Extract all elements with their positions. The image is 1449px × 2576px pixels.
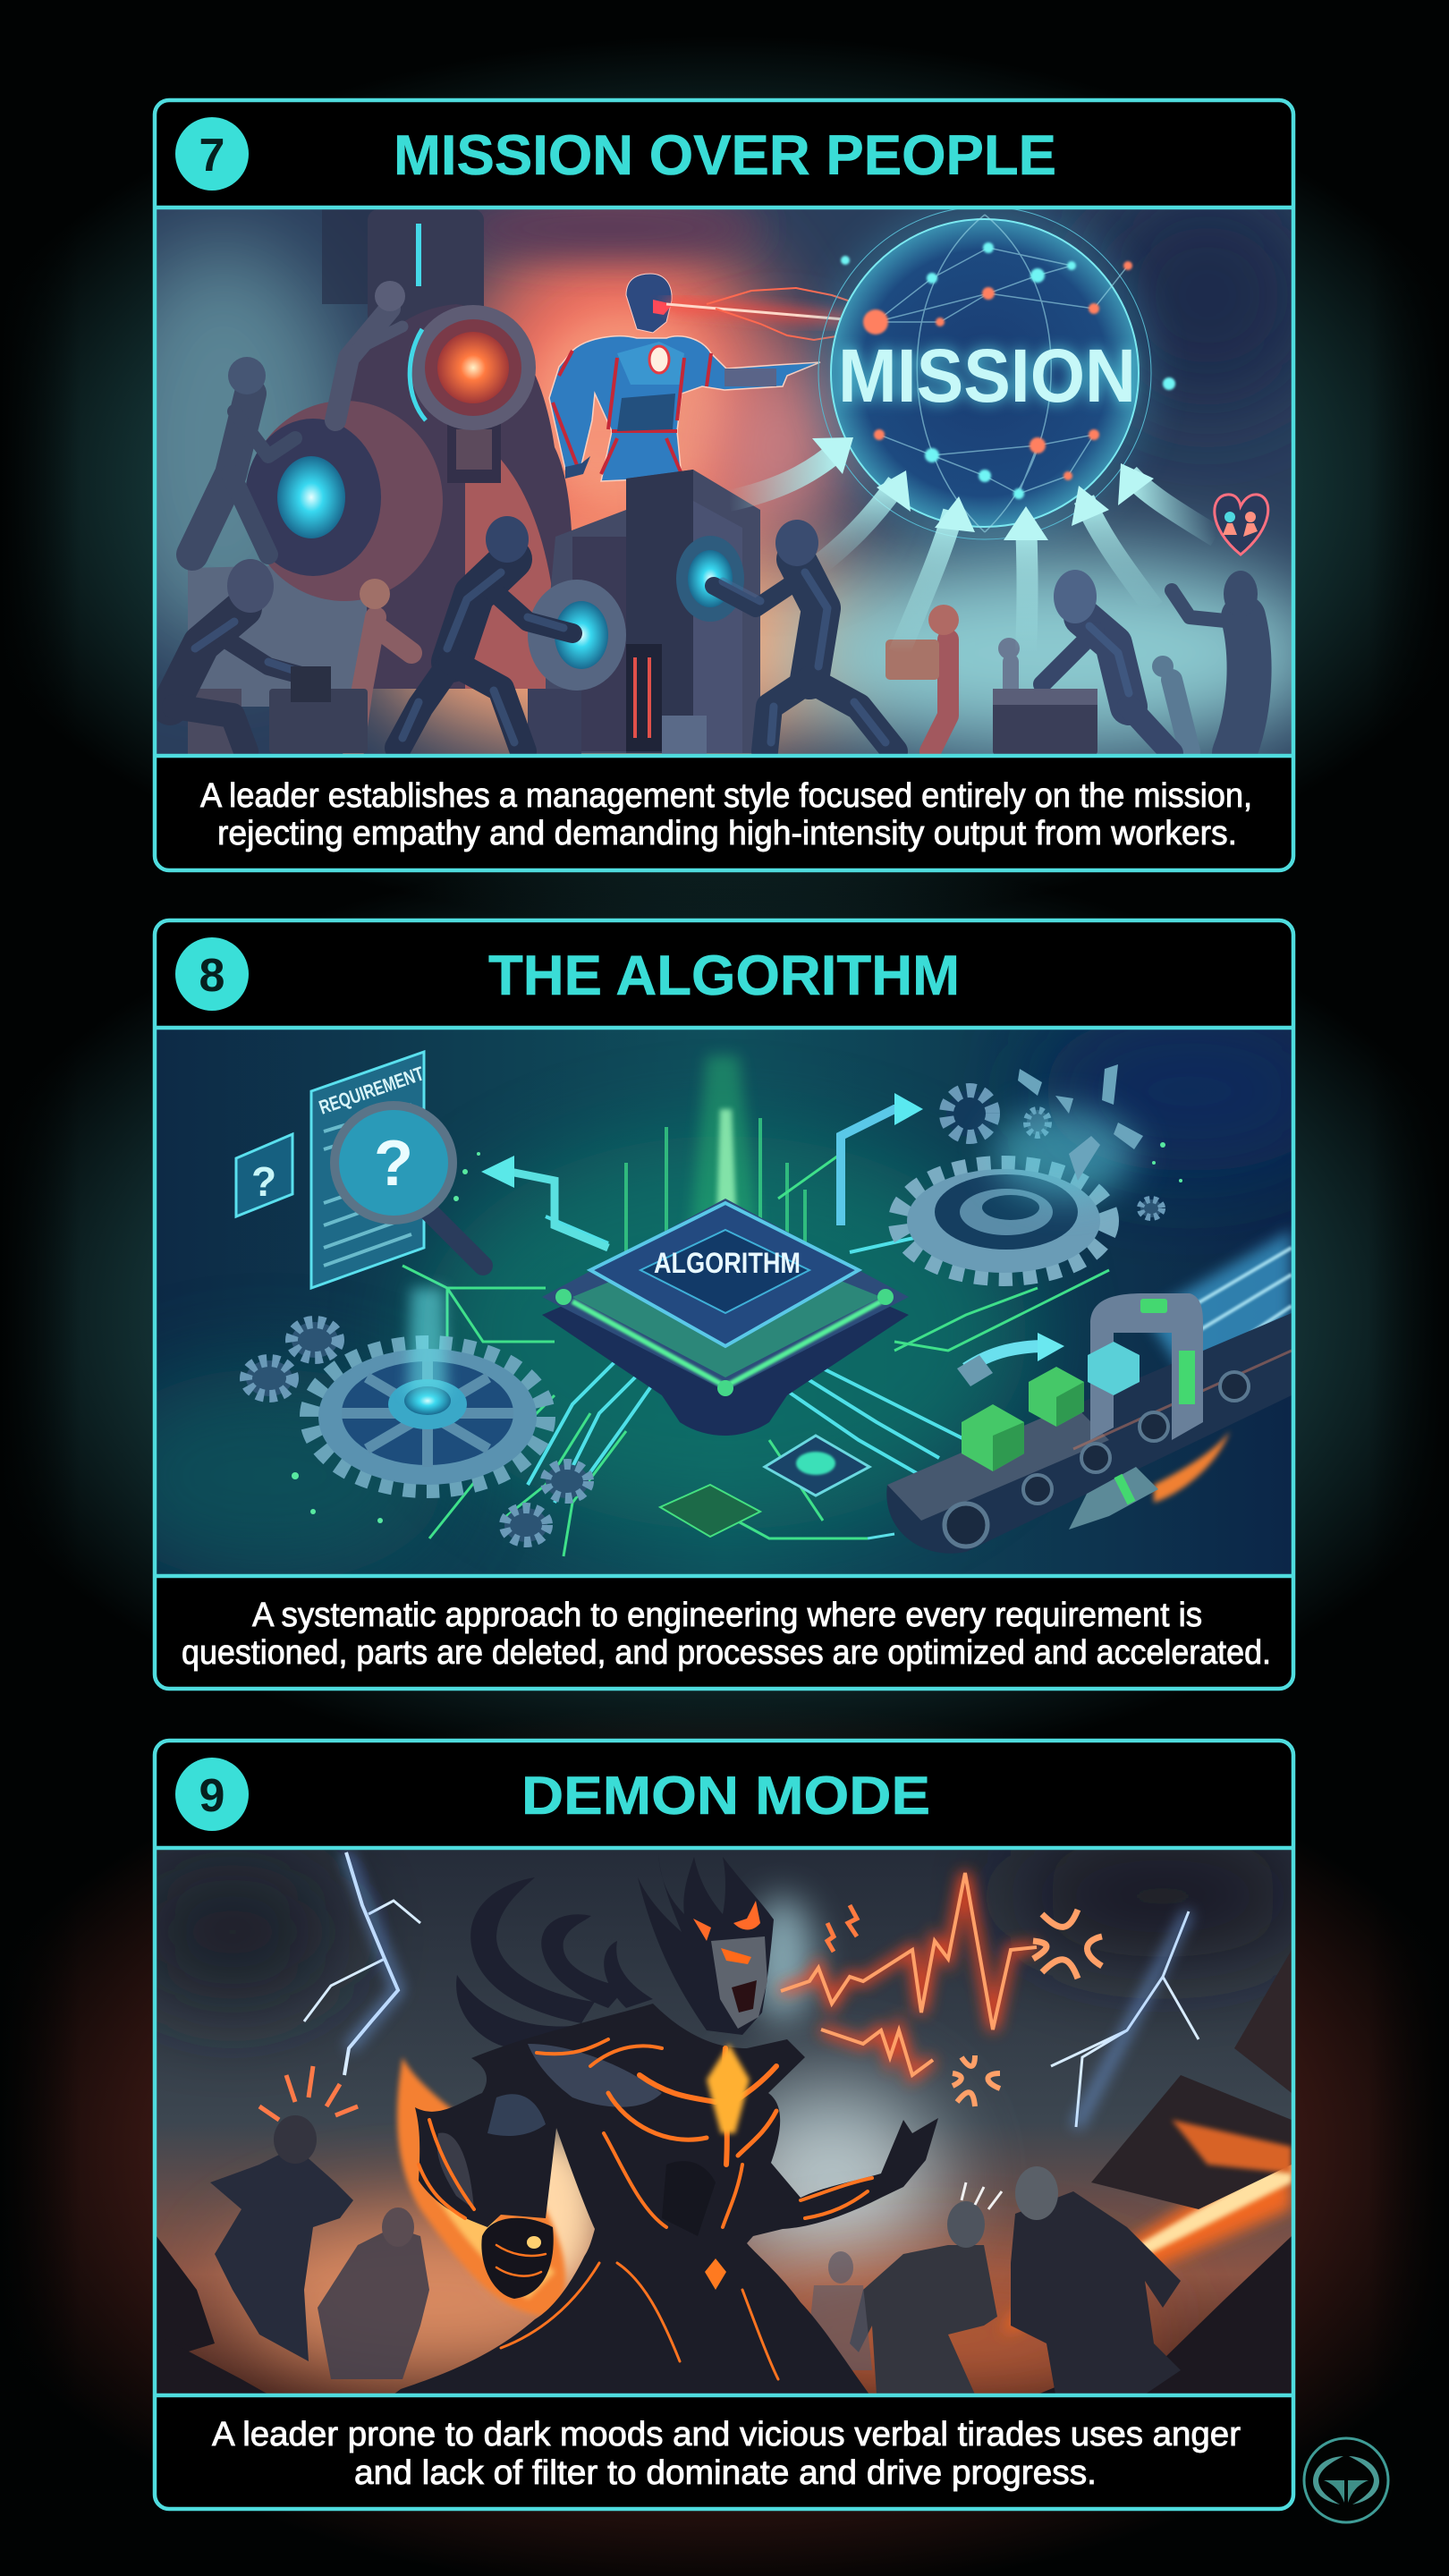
panel 9 black base [155, 1741, 1293, 2509]
circuit traces [402, 1154, 1109, 1556]
product boxes [962, 1342, 1140, 1471]
right worker [1042, 617, 1172, 753]
front left worker [170, 608, 318, 751]
limb highlights [195, 572, 1129, 742]
panel 7: mission over people [98, 100, 1333, 870]
bald man right [1011, 2191, 1181, 2394]
panel 7 frame [155, 100, 1293, 870]
mission word on sphere: MISSION [838, 334, 1136, 418]
panel 9: demon mode [125, 1741, 1315, 2509]
heading: mission over people: MISSION OVER PEOPLE [394, 124, 1056, 187]
mid left man [318, 2227, 429, 2379]
panel 7 header [175, 117, 1056, 191]
badge 7: 7 [199, 130, 225, 182]
icon: heart with people [1215, 495, 1268, 555]
background workers [192, 309, 1190, 751]
pedestal [528, 470, 760, 755]
illustration: robot workers and leader pointing at the mission sphere [157, 209, 1292, 754]
panel 7 caption [200, 777, 1252, 852]
lava veins [419, 2039, 872, 2379]
panel 8 header [175, 937, 960, 1011]
magnifying glass: ? [374, 1128, 413, 1199]
chip: algorithm [542, 1199, 909, 1436]
panel 8 caption [182, 1597, 1271, 1672]
hair tendrils [456, 1877, 653, 2097]
finished part with flame [1069, 1431, 1230, 1530]
light stream behind conveyor [1145, 1230, 1292, 1395]
magnifying glass [335, 1106, 483, 1266]
machine blue ring [245, 401, 443, 601]
sparkle particles [292, 1142, 1182, 1523]
lightning bolts [304, 1852, 1199, 2127]
rocks [157, 2236, 1292, 2394]
face [711, 1936, 767, 2029]
heading: the algorithm: THE ALGORITHM [488, 945, 960, 1007]
front workers [170, 559, 1250, 753]
demon figure [394, 1853, 938, 2394]
leader figure [549, 274, 820, 481]
illustration: algorithm chip, gears and conveyor [89, 1011, 1342, 1583]
small chips [660, 1436, 869, 1537]
big right gear dissolving [898, 1109, 1136, 1276]
badge 9: 9 [199, 1770, 225, 1822]
document: requirement: REQUIREMENT [316, 1062, 427, 1119]
arrows left and up right [481, 1093, 1064, 1538]
bald man covering face [850, 2245, 997, 2394]
panel 9 caption: and lack of filter to dominate and drive progress. [354, 2454, 1097, 2492]
right pusher [714, 559, 894, 751]
green light beam above chip [626, 1055, 805, 1261]
waveform and anger signs [781, 1873, 1102, 2106]
panel 8 black base [155, 920, 1293, 1689]
panel 7 black base [155, 100, 1293, 870]
torso, robe and arms [394, 2004, 938, 2394]
badge 8: 8 [199, 950, 225, 1002]
fleeing people [210, 2115, 1181, 2394]
fists [481, 2218, 554, 2299]
chip: algorithm: ALGORITHM [654, 1247, 801, 1279]
machine tower [188, 209, 572, 707]
panel 9 header [175, 1758, 930, 1831]
left man holding head [210, 2147, 353, 2361]
cyan data streams [528, 1216, 966, 1503]
orange beam at right [1002, 1950, 1292, 2334]
left pusher [398, 559, 572, 751]
heading: demon mode: DEMON MODE [521, 1766, 930, 1826]
small pen part [957, 1355, 993, 1386]
panel 7 caption: A leader establishes a management style focused entirely on the mission, [200, 777, 1252, 815]
red laser from eye [666, 288, 876, 340]
mission word on sphere: MISSION [838, 334, 1136, 418]
mission sphere [815, 203, 1175, 543]
panel 7 caption: rejecting empathy and demanding high-intensity output from workers. [217, 815, 1237, 852]
head and hair spikes [638, 1853, 774, 2035]
panel 8 caption: questioned, parts are deleted, and processes are optimized and accelerated. [182, 1634, 1271, 1672]
conveyor belt [886, 1313, 1292, 1554]
panel 8: the algorithm [89, 920, 1342, 1689]
flames behind demon [397, 2057, 565, 2317]
background figures [828, 2251, 853, 2284]
panel 9 caption: A leader prone to dark moods and vicious verbal tirades uses anger [212, 2416, 1241, 2453]
document: requirement [311, 1052, 427, 1288]
question mark box [236, 1134, 292, 1216]
panel 8 caption: A systematic approach to engineering where every requirement is [252, 1597, 1202, 1634]
flying fragments [1018, 1064, 1143, 1181]
badge 8 [175, 937, 249, 1011]
badge 9 [175, 1758, 249, 1831]
small gears [246, 1090, 1162, 1542]
badge 7 [175, 117, 249, 191]
illustration: raging demon among fleeing people [125, 1834, 1315, 2397]
impact sparks over left figure [259, 2066, 358, 2120]
body highlights [528, 2044, 662, 2107]
right silhouette [1172, 590, 1250, 753]
panel 9 caption [212, 2416, 1241, 2492]
icon: corner logo [1299, 2433, 1394, 2528]
big left gear [309, 1288, 546, 1488]
machine red ring [410, 305, 536, 430]
chest glow [707, 2044, 750, 2133]
panel 9 frame [155, 1741, 1293, 2509]
panel 8 frame [155, 920, 1293, 1689]
question mark box: ? [251, 1158, 276, 1205]
arrows rising into the sphere [729, 437, 1216, 653]
scanner arch [1090, 1293, 1203, 1440]
